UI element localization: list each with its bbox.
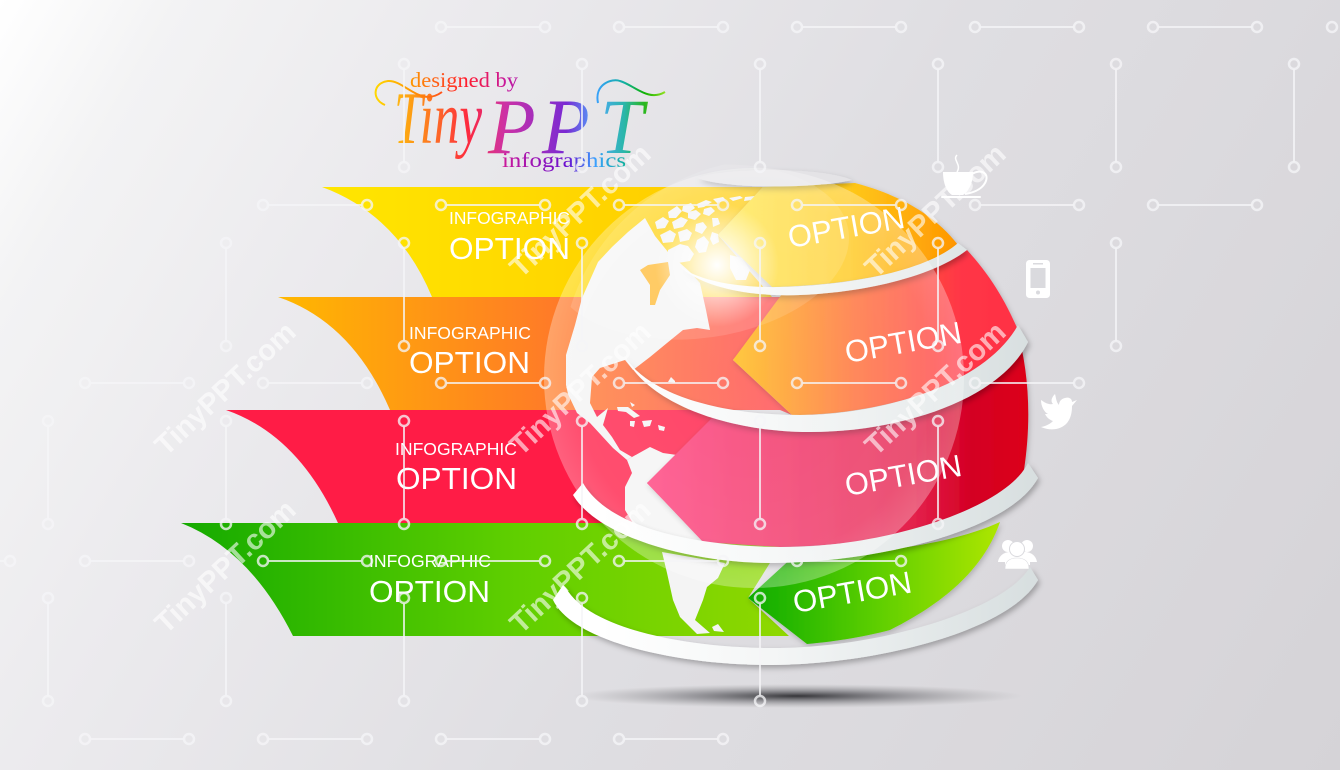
map: south america lower bbox=[662, 552, 725, 634]
watermark 4: TinyPPT.com bbox=[504, 316, 657, 462]
label 3: OPTION bbox=[396, 461, 517, 496]
watermark 7: TinyPPT.com bbox=[859, 316, 1012, 462]
label 4: OPTION bbox=[369, 574, 490, 609]
logo: infographics: infographics bbox=[502, 148, 626, 172]
label 4 bbox=[369, 551, 491, 609]
icon: smartphone bbox=[1026, 260, 1050, 298]
watermark 3: TinyPPT.com bbox=[504, 138, 657, 284]
label 4: INFOGRAPHIC bbox=[369, 551, 491, 571]
ground shadow bbox=[572, 684, 1022, 708]
label 3: INFOGRAPHIC bbox=[395, 439, 517, 459]
panel: left banners bbox=[181, 187, 795, 636]
top lid bbox=[697, 170, 852, 186]
banner: orange bbox=[278, 297, 792, 415]
logo: PPT: PPT bbox=[487, 83, 648, 170]
left labels bbox=[369, 208, 570, 609]
glass sphere overlay bbox=[539, 146, 964, 588]
watermark 2: TinyPPT.com bbox=[149, 494, 302, 640]
map: south america upper bbox=[625, 447, 710, 548]
icon: people group bbox=[998, 540, 1037, 569]
ribbon 1 bbox=[677, 243, 967, 295]
map: arctic islands bbox=[655, 196, 755, 280]
sphere option 4: OPTION bbox=[790, 565, 914, 620]
glass disc bbox=[544, 168, 964, 588]
ribbon 3 bbox=[573, 463, 1038, 563]
arrow band: red bbox=[647, 350, 1028, 547]
glare bbox=[655, 203, 779, 327]
arrow band: yellow bbox=[718, 183, 958, 287]
label 1: OPTION bbox=[449, 231, 570, 266]
panel: white ribbons bbox=[553, 170, 1038, 665]
logo: designed by: designed by bbox=[410, 68, 518, 92]
label 1: INFOGRAPHIC bbox=[449, 208, 570, 228]
logo: Tiny: Tiny bbox=[394, 78, 482, 160]
arrow band: green bbox=[748, 522, 1000, 644]
sphere option 3: OPTION bbox=[842, 448, 964, 503]
label 1 bbox=[449, 208, 570, 266]
map: caribbean islands bbox=[617, 377, 675, 431]
ribbon 2 bbox=[625, 325, 1028, 432]
label 2 bbox=[409, 323, 531, 380]
logo bbox=[376, 68, 665, 172]
watermark 5: TinyPPT.com bbox=[504, 494, 657, 640]
logo: left swash bbox=[376, 81, 442, 105]
banner: yellow bbox=[322, 187, 772, 297]
ribbon 4 bbox=[553, 567, 1038, 665]
panel: sphere bands bbox=[647, 183, 1028, 644]
icon: twitter bird bbox=[1041, 394, 1077, 429]
map: hudson bay bbox=[640, 262, 670, 305]
banner: red bbox=[226, 410, 725, 548]
logo: right swash bbox=[597, 80, 665, 103]
watermarks bbox=[149, 138, 1012, 640]
icon: coffee cup bbox=[941, 155, 987, 198]
glass lens highlight bbox=[570, 185, 849, 340]
sphere option 1: OPTION bbox=[785, 200, 907, 255]
watermark 1: TinyPPT.com bbox=[149, 316, 302, 462]
label 3 bbox=[395, 439, 517, 496]
banner: green bbox=[181, 523, 795, 636]
sphere labels bbox=[785, 200, 964, 620]
label 2: OPTION bbox=[409, 345, 530, 380]
map: north and central america bbox=[566, 218, 710, 460]
label 2: INFOGRAPHIC bbox=[409, 323, 531, 343]
arrow band: orange bbox=[733, 250, 1018, 415]
world map continents bbox=[566, 196, 755, 634]
watermark 6: TinyPPT.com bbox=[859, 138, 1012, 284]
sphere option 2: OPTION bbox=[842, 315, 964, 370]
